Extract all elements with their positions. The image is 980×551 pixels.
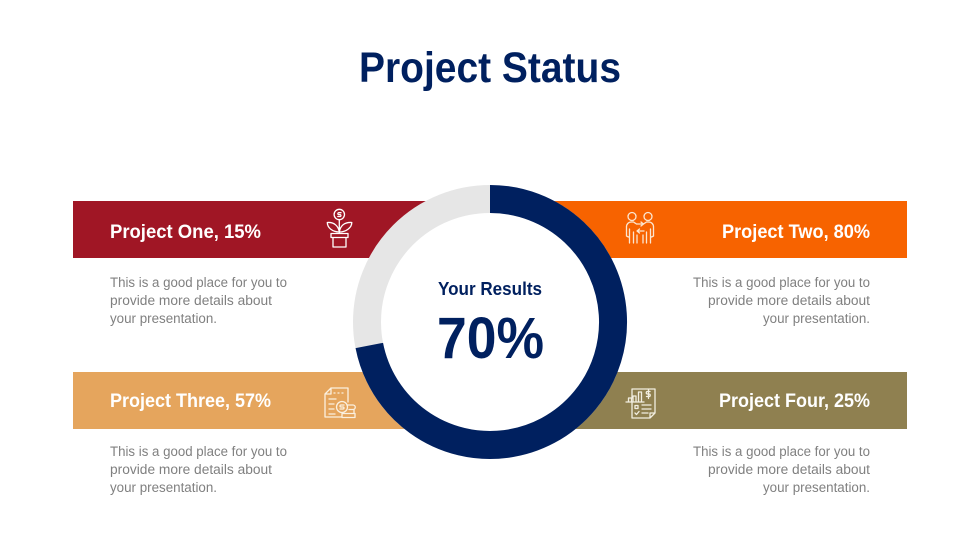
center label [437,279,544,371]
project four description: your presentation. [763,480,870,495]
panel: project three [73,372,433,495]
project four description: This is a good place for you to [693,444,870,459]
panel: project four [547,372,907,495]
panel: project one [73,201,433,326]
project one description: provide more details about [110,293,272,308]
project four bar [547,372,907,429]
icon: two people exchanging [626,212,654,243]
icon: document with coins [325,388,355,418]
project four heading: Project Four, 25% [719,391,870,412]
project three bar [73,372,433,429]
project one bar [73,201,433,258]
panel: project two [547,201,907,326]
project two description: your presentation. [763,311,870,326]
70 percent value: 70% [437,306,544,371]
project three description: This is a good place for you to [110,444,287,459]
inner white disc [367,199,613,445]
project two heading: Project Two, 80% [722,222,870,243]
project one description: your presentation. [110,311,217,326]
project four description: provide more details about [708,462,870,477]
project one heading: Project One, 15% [110,222,261,243]
icon: plant with dollar coin [327,209,352,247]
project two description: provide more details about [708,293,870,308]
ring remainder [367,199,613,445]
icon: report with chart [626,389,655,418]
project two bar [547,201,907,258]
project one description: This is a good place for you to [110,275,287,290]
project three description: provide more details about [110,462,272,477]
donut chart: 70 percent [367,199,613,445]
title: Project Status [359,44,621,92]
project three description: your presentation. [110,480,217,495]
project three heading: Project Three, 57% [110,391,271,412]
your results label: Your Results [438,279,542,299]
ring progress [369,199,613,445]
project two description: This is a good place for you to [693,275,870,290]
